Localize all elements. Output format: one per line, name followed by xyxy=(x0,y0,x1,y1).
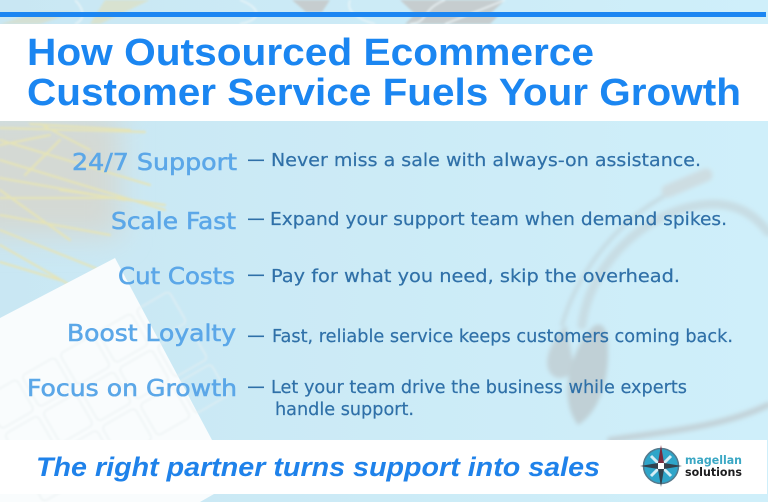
row: Focus on Growth: Focus on Growth xyxy=(27,376,237,402)
row: 24/7 Support: Never miss a sale with always-on assistance. xyxy=(271,150,701,171)
row: 24/7 Support: 24/7 Support xyxy=(72,150,237,176)
logo: Magellan Solutions: magellan xyxy=(685,453,742,467)
grass xyxy=(0,124,165,285)
row: Boost Loyalty: Boost Loyalty xyxy=(67,321,236,347)
row: Focus on Growth xyxy=(27,376,687,420)
logo: Magellan Solutions xyxy=(640,445,742,487)
title: How Outsourced Ecommerce xyxy=(27,32,594,74)
title band xyxy=(0,24,768,121)
benefit list xyxy=(27,150,733,420)
row: 24/7 Support xyxy=(72,150,701,176)
tagline: The right partner turns support into sales xyxy=(36,452,600,482)
headset xyxy=(547,175,768,440)
title: Customer Service Fuels Your Growth xyxy=(27,72,741,114)
row: Scale Fast xyxy=(111,209,727,235)
row: Boost Loyalty xyxy=(67,321,733,347)
top strip: binder clips xyxy=(0,0,505,24)
top blue rule xyxy=(0,12,766,17)
row: Boost Loyalty: Fast, reliable service keeps customers coming back. xyxy=(272,326,733,347)
icon: compass xyxy=(640,445,682,487)
row: Cut Costs xyxy=(118,264,680,290)
keyboard xyxy=(0,258,229,502)
logo: Magellan Solutions: solutions xyxy=(685,465,742,479)
row: Focus on Growth: Let your team drive the business while experts xyxy=(271,377,687,398)
row: Cut Costs: Pay for what you need, skip the overhead. xyxy=(271,266,680,287)
row: Scale Fast: Expand your support team when demand spikes. xyxy=(270,209,727,230)
row: Cut Costs: Cut Costs xyxy=(118,264,235,290)
row: Focus on Growth: handle support. xyxy=(275,399,414,420)
row: Scale Fast: Scale Fast xyxy=(111,209,236,235)
bottom band xyxy=(0,440,767,494)
title xyxy=(27,32,741,114)
